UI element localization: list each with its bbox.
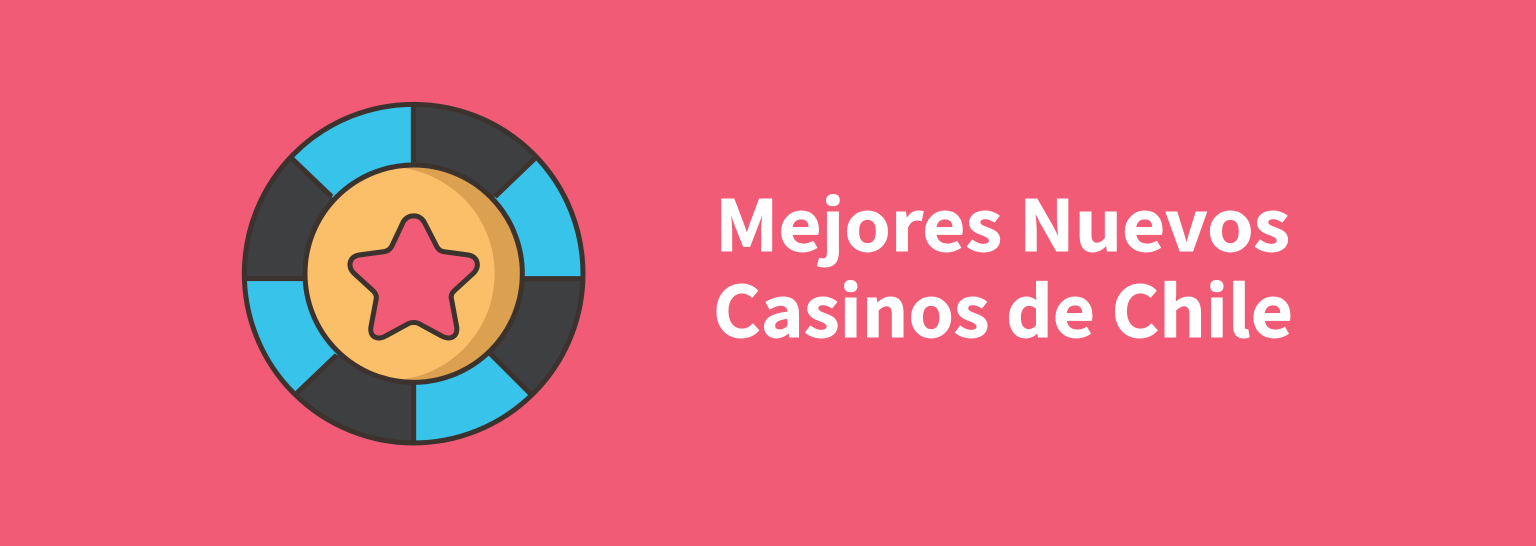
chip centre light disc <box>308 168 495 379</box>
title line 2: Casinos de Chile <box>713 257 1293 358</box>
icon: star <box>350 216 477 338</box>
icon: casino chip <box>242 102 586 446</box>
title line 1: Mejores Nuevos <box>715 171 1290 272</box>
banner background and content <box>242 102 1290 446</box>
chip outer outline <box>244 104 583 443</box>
chip blue segments <box>247 107 580 440</box>
chip segment dividers <box>245 105 582 442</box>
title <box>713 171 1293 358</box>
chip centre shaded disc <box>305 165 522 382</box>
chip centre outline <box>305 165 522 382</box>
chip ring base <box>244 104 583 443</box>
